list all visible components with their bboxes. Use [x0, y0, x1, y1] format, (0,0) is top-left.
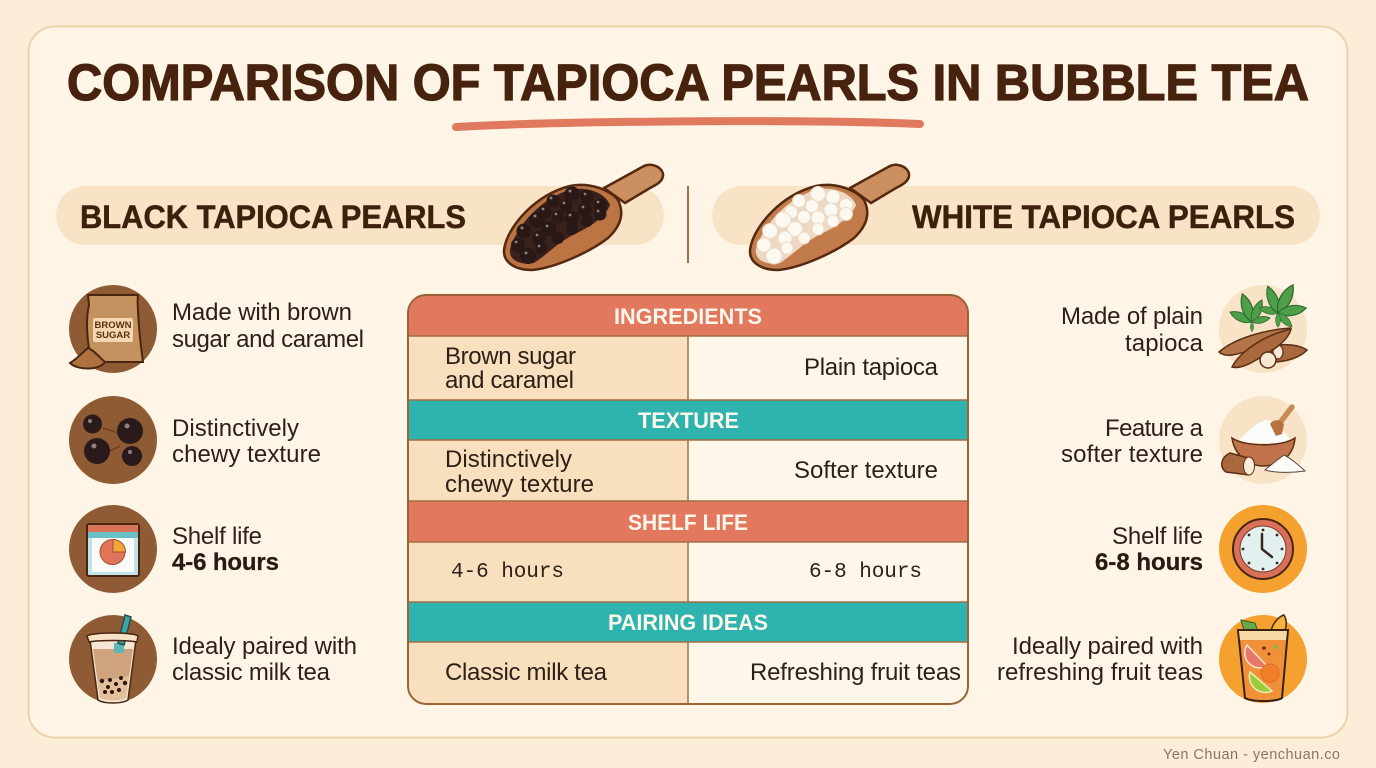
text: Made with brown [172, 299, 352, 326]
section: pairing ideas: PAIRING IDEAS [608, 610, 768, 635]
icon: calendar [69, 505, 157, 593]
section: shelf life: SHELF LIFE [628, 510, 748, 535]
left column: shelf life [69, 505, 279, 593]
icon: cassava plant [1219, 282, 1307, 373]
left column: ingredients: sugar and caramel [172, 326, 364, 353]
section: texture: chewy texture [445, 471, 594, 498]
text: Idealy paired with [172, 633, 357, 660]
title underline [456, 121, 920, 127]
icon: scoop with white pearls [750, 165, 909, 270]
left column: shelf life: 4-6 hours [172, 549, 279, 576]
text: Shelf life [172, 523, 262, 550]
right column: pairing: refreshing fruit teas [997, 659, 1203, 686]
header divider [687, 186, 689, 263]
text: Made of plain [1061, 303, 1203, 330]
icon: chewy pearls [69, 396, 157, 484]
left column: texture: chewy texture [172, 441, 321, 468]
right column: ingredients [1061, 282, 1307, 373]
icon: scoop with black pearls [504, 165, 663, 270]
left column: pairing: classic milk tea [172, 659, 331, 686]
left column: texture [69, 396, 321, 484]
text: Feature a [1105, 415, 1204, 442]
section: shelf life: 6-8 hours [809, 561, 922, 584]
section: pairing ideas: Refreshing fruit teas [750, 659, 961, 686]
section: ingredients [408, 295, 968, 394]
section: texture: Distinctively [445, 446, 572, 473]
section: ingredients: Plain tapioca [804, 354, 939, 381]
right column: texture: softer texture [1061, 441, 1203, 468]
section: pairing ideas: Classic milk tea [445, 659, 608, 686]
header: white tapioca pearls: WHITE TAPIOCA PEARLS [912, 199, 1295, 235]
section: texture [408, 400, 968, 498]
credit: Yen Chuan - yenchuan.co [1163, 747, 1340, 763]
section: shelf life: 4-6 hours [451, 561, 564, 584]
header: black tapioca pearls [56, 186, 664, 245]
header: black tapioca pearls: BLACK TAPIOCA PEARLS [80, 199, 466, 235]
icon: milk tea [69, 615, 157, 703]
right column: ingredients: tapioca [1125, 330, 1204, 357]
left column: ingredients [69, 285, 364, 373]
right column: shelf life [1095, 505, 1307, 593]
section: ingredients: Brown sugar [445, 343, 576, 370]
icon: tapioca flour bowl [1219, 396, 1307, 484]
right column: pairing [997, 615, 1307, 703]
right column: texture [1061, 396, 1307, 484]
icon: brown sugar bag: BROWN [95, 320, 132, 331]
icon: brown sugar bag [69, 285, 157, 373]
section: ingredients: INGREDIENTS [614, 304, 762, 329]
icon: fruit tea glass [1219, 615, 1307, 703]
section: ingredients: and caramel [445, 367, 574, 394]
section: shelf life [408, 501, 968, 584]
comparison table [408, 295, 968, 704]
icon: clock [1219, 505, 1307, 593]
right column: shelf life: 6-8 hours [1095, 549, 1203, 576]
icon: brown sugar bag: SUGAR [96, 330, 130, 341]
row backgrounds [408, 336, 688, 704]
title: COMPARISON OF TAPIOCA PEARLS IN BUBBLE TEA [67, 54, 1309, 111]
section: texture: TEXTURE [638, 408, 739, 433]
header: white tapioca pearls [712, 186, 1320, 245]
text: Ideally paired with [1012, 633, 1203, 660]
text: Distinctively [172, 415, 299, 442]
left column: pairing [69, 615, 357, 703]
section: texture: Softer texture [794, 457, 938, 484]
text: Shelf life [1112, 523, 1203, 550]
section: pairing ideas [408, 602, 968, 686]
